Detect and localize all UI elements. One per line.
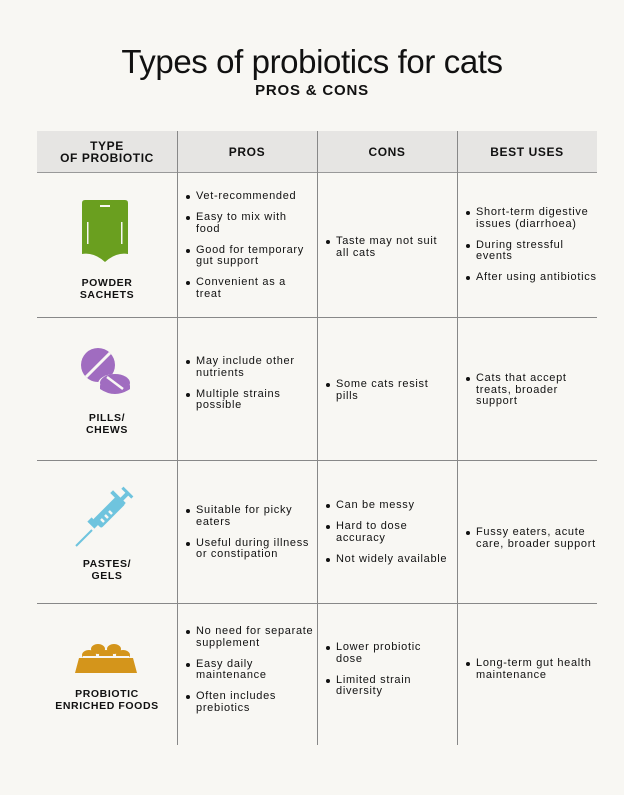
best uses: powder: events xyxy=(476,250,513,262)
pros: pastes: eaters xyxy=(196,516,231,528)
pros: foods: maintenance xyxy=(196,669,267,681)
pros: pills: Multiple strains xyxy=(196,388,281,400)
cons: powder: all cats xyxy=(336,246,376,258)
best uses: powder: During stressful xyxy=(476,238,564,250)
icon: powder sachet xyxy=(82,200,128,262)
best uses: pastes: care, broader support xyxy=(476,538,596,550)
pros: pills: possible xyxy=(196,399,242,411)
cons: foods: dose xyxy=(336,652,363,664)
pros: foods: No need for separate xyxy=(196,625,313,637)
label: pills/chews: CHEWS xyxy=(86,424,128,436)
pros: pills: nutrients xyxy=(196,366,244,378)
cons: pastes: Hard to dose xyxy=(336,520,407,532)
best uses: pills: treats, broader xyxy=(476,384,558,396)
best uses: powder xyxy=(466,206,597,283)
title: Types of probiotics for cats xyxy=(121,43,503,80)
label: probiotic enriched foods xyxy=(55,688,159,712)
cons: foods: diversity xyxy=(336,685,383,697)
best uses: foods: maintenance xyxy=(476,668,547,680)
label: pastes/gels: PASTES/ xyxy=(83,558,131,570)
table header: PROS xyxy=(229,145,265,159)
icon: pills xyxy=(81,348,130,394)
pros: foods: Easy daily xyxy=(196,658,253,670)
cons: pastes xyxy=(326,499,447,564)
cons: pastes: accuracy xyxy=(336,532,386,544)
cons: powder xyxy=(326,235,437,258)
cons: foods: Limited strain xyxy=(336,674,411,686)
best uses: powder: Short-term digestive xyxy=(476,206,588,218)
best uses: foods: Long-term gut health xyxy=(476,657,592,669)
table header: CONS xyxy=(368,145,406,159)
pros: powder: Convenient as a xyxy=(196,276,286,288)
table header xyxy=(37,131,597,173)
pros: powder: Easy to mix with xyxy=(196,211,287,223)
cons: pastes: Not widely available xyxy=(336,552,447,564)
best uses: pastes xyxy=(466,526,596,550)
pros: powder: Vet-recommended xyxy=(196,190,296,202)
pros: foods: Often includes xyxy=(196,690,276,702)
pros: powder: food xyxy=(196,222,220,234)
best uses: pills: Cats that accept xyxy=(476,372,567,384)
best uses: powder: issues (diarrhoea) xyxy=(476,218,577,230)
label: pills/chews xyxy=(86,412,128,436)
pros: pastes: Suitable for picky xyxy=(196,504,292,516)
label: probiotic enriched foods: ENRICHED FOODS xyxy=(55,700,159,712)
table header: OF PROBIOTIC xyxy=(60,151,154,165)
best uses: pastes: Fussy eaters, acute xyxy=(476,526,585,538)
table header: BEST USES xyxy=(490,145,564,159)
pros: foods: supplement xyxy=(196,636,260,648)
cons: pills: pills xyxy=(336,390,358,402)
pros: foods xyxy=(186,625,313,714)
pros: pastes: Useful during illness xyxy=(196,536,309,548)
pros: pills xyxy=(186,355,295,411)
cons: foods xyxy=(326,641,421,697)
table header: TYPE xyxy=(90,139,124,153)
best uses: powder: After using antibiotics xyxy=(476,271,597,283)
pros: powder xyxy=(186,190,304,300)
pros: powder: treat xyxy=(196,288,222,300)
icon: food bowl xyxy=(75,644,137,673)
label: probiotic enriched foods: PROBIOTIC xyxy=(75,688,139,700)
pros: pastes: or constipation xyxy=(196,548,278,560)
icon: syringe xyxy=(75,486,134,547)
label: pastes/gels: GELS xyxy=(92,570,122,582)
best uses: foods xyxy=(466,657,592,680)
label: powder sachets xyxy=(80,277,134,301)
best uses: pills xyxy=(466,372,567,407)
cons: pastes: Can be messy xyxy=(336,499,415,511)
label: powder sachets: POWDER xyxy=(82,277,132,289)
label: pills/chews: PILLS/ xyxy=(89,412,125,424)
pros: pastes xyxy=(186,504,309,560)
pros: powder: gut support xyxy=(196,255,259,267)
subtitle: PROS & CONS xyxy=(255,82,369,99)
best uses: pills: support xyxy=(476,395,518,407)
pros: pills: May include other xyxy=(196,355,295,367)
pros: powder: Good for temporary xyxy=(196,244,304,256)
cons: pills xyxy=(326,378,429,402)
label: powder sachets: SACHETS xyxy=(80,289,134,301)
cons: foods: Lower probiotic xyxy=(336,641,421,653)
cons: powder: Taste may not suit xyxy=(336,235,437,247)
pros: foods: prebiotics xyxy=(196,702,250,714)
cons: pills: Some cats resist xyxy=(336,378,429,390)
label: pastes/gels xyxy=(83,558,131,582)
